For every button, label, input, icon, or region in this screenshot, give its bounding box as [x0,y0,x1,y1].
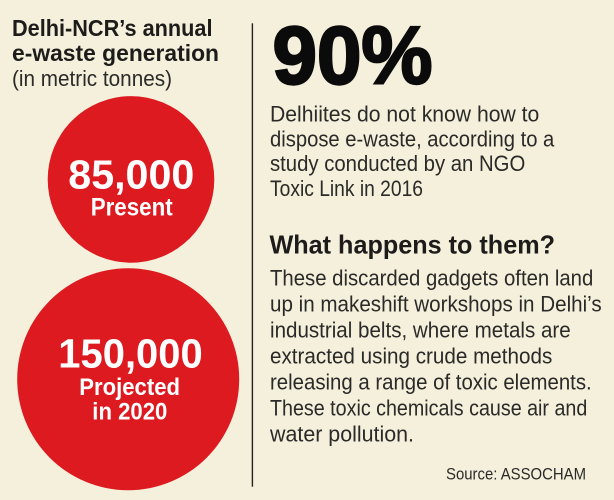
circle: projected [17,268,239,490]
body text: industrial belts, where metals are [270,317,571,342]
left heading: (in metric tonnes) [12,66,172,91]
stat description [270,102,555,201]
left heading: Delhi-NCR’s annual [12,15,212,41]
stat description: Toxic Link in 2016 [270,176,423,201]
projected value: 150,000 [58,330,203,376]
circle: present [48,96,214,263]
body text: water pollution. [269,421,414,446]
body text: extracted using crude methods [270,343,552,368]
source: Source: ASSOCHAM [446,464,586,483]
stat description: study conducted by an NGO [270,151,525,176]
present label: Present [91,194,173,222]
projected label [79,374,180,425]
stat description: dispose e-waste, according to a [270,126,555,152]
projected label: in 2020 [92,398,167,425]
subheading: What happens to them? [270,229,555,259]
present value: 85,000 [68,151,194,197]
left heading [12,15,219,91]
big stat: 90% [272,10,432,102]
projected label: Projected [79,374,180,401]
left heading: e-waste generation [12,40,219,66]
stat description: Delhiites do not know how to [270,102,539,127]
body text [269,266,602,446]
